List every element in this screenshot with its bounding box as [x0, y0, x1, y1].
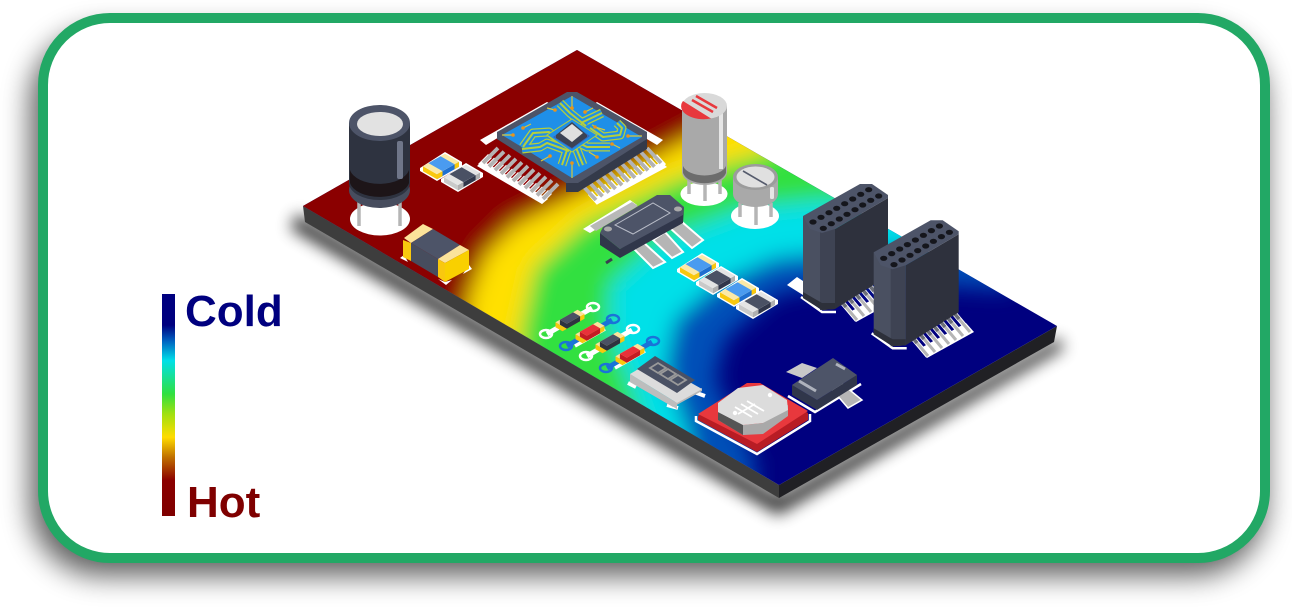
chip solder pads: [477, 161, 548, 204]
legend label: cold: Cold: [185, 287, 283, 336]
chip traces: [502, 96, 642, 178]
icon: axial resistors: [540, 303, 659, 372]
chip body: [497, 139, 647, 192]
board shadow: [290, 214, 1064, 515]
legend colour bar: [162, 294, 175, 516]
chip die: [547, 119, 597, 152]
legend label: hot: Hot: [187, 478, 261, 527]
icon: SOT transistor: [786, 358, 862, 412]
board right edge: [779, 326, 1057, 498]
icon: small SMD pair near chip: [420, 152, 483, 192]
icon: chip resistor with 000 marking: [628, 356, 705, 409]
thermal map surface: [303, 50, 1057, 485]
icon: trimmer potentiometer: [731, 164, 779, 229]
icon: red pad power inductor: [696, 383, 810, 454]
legend: temperature scale: [162, 287, 283, 527]
icon: silver capacitor with red top: [680, 93, 728, 206]
icon: quad flat package microchip: [477, 92, 667, 204]
icon: first pin header connector: [787, 184, 903, 322]
circuit board assembly: [280, 30, 1080, 520]
icon: black electrolytic capacitor: [349, 105, 410, 236]
icon: second pin header connector: [872, 220, 974, 358]
board left edge: [303, 206, 779, 498]
icon: yellow capped capacitor: [400, 224, 472, 285]
icon: voltage regulator package: [583, 195, 703, 268]
icon: row of SMD parts: [677, 253, 778, 319]
chip leads: [480, 156, 550, 202]
